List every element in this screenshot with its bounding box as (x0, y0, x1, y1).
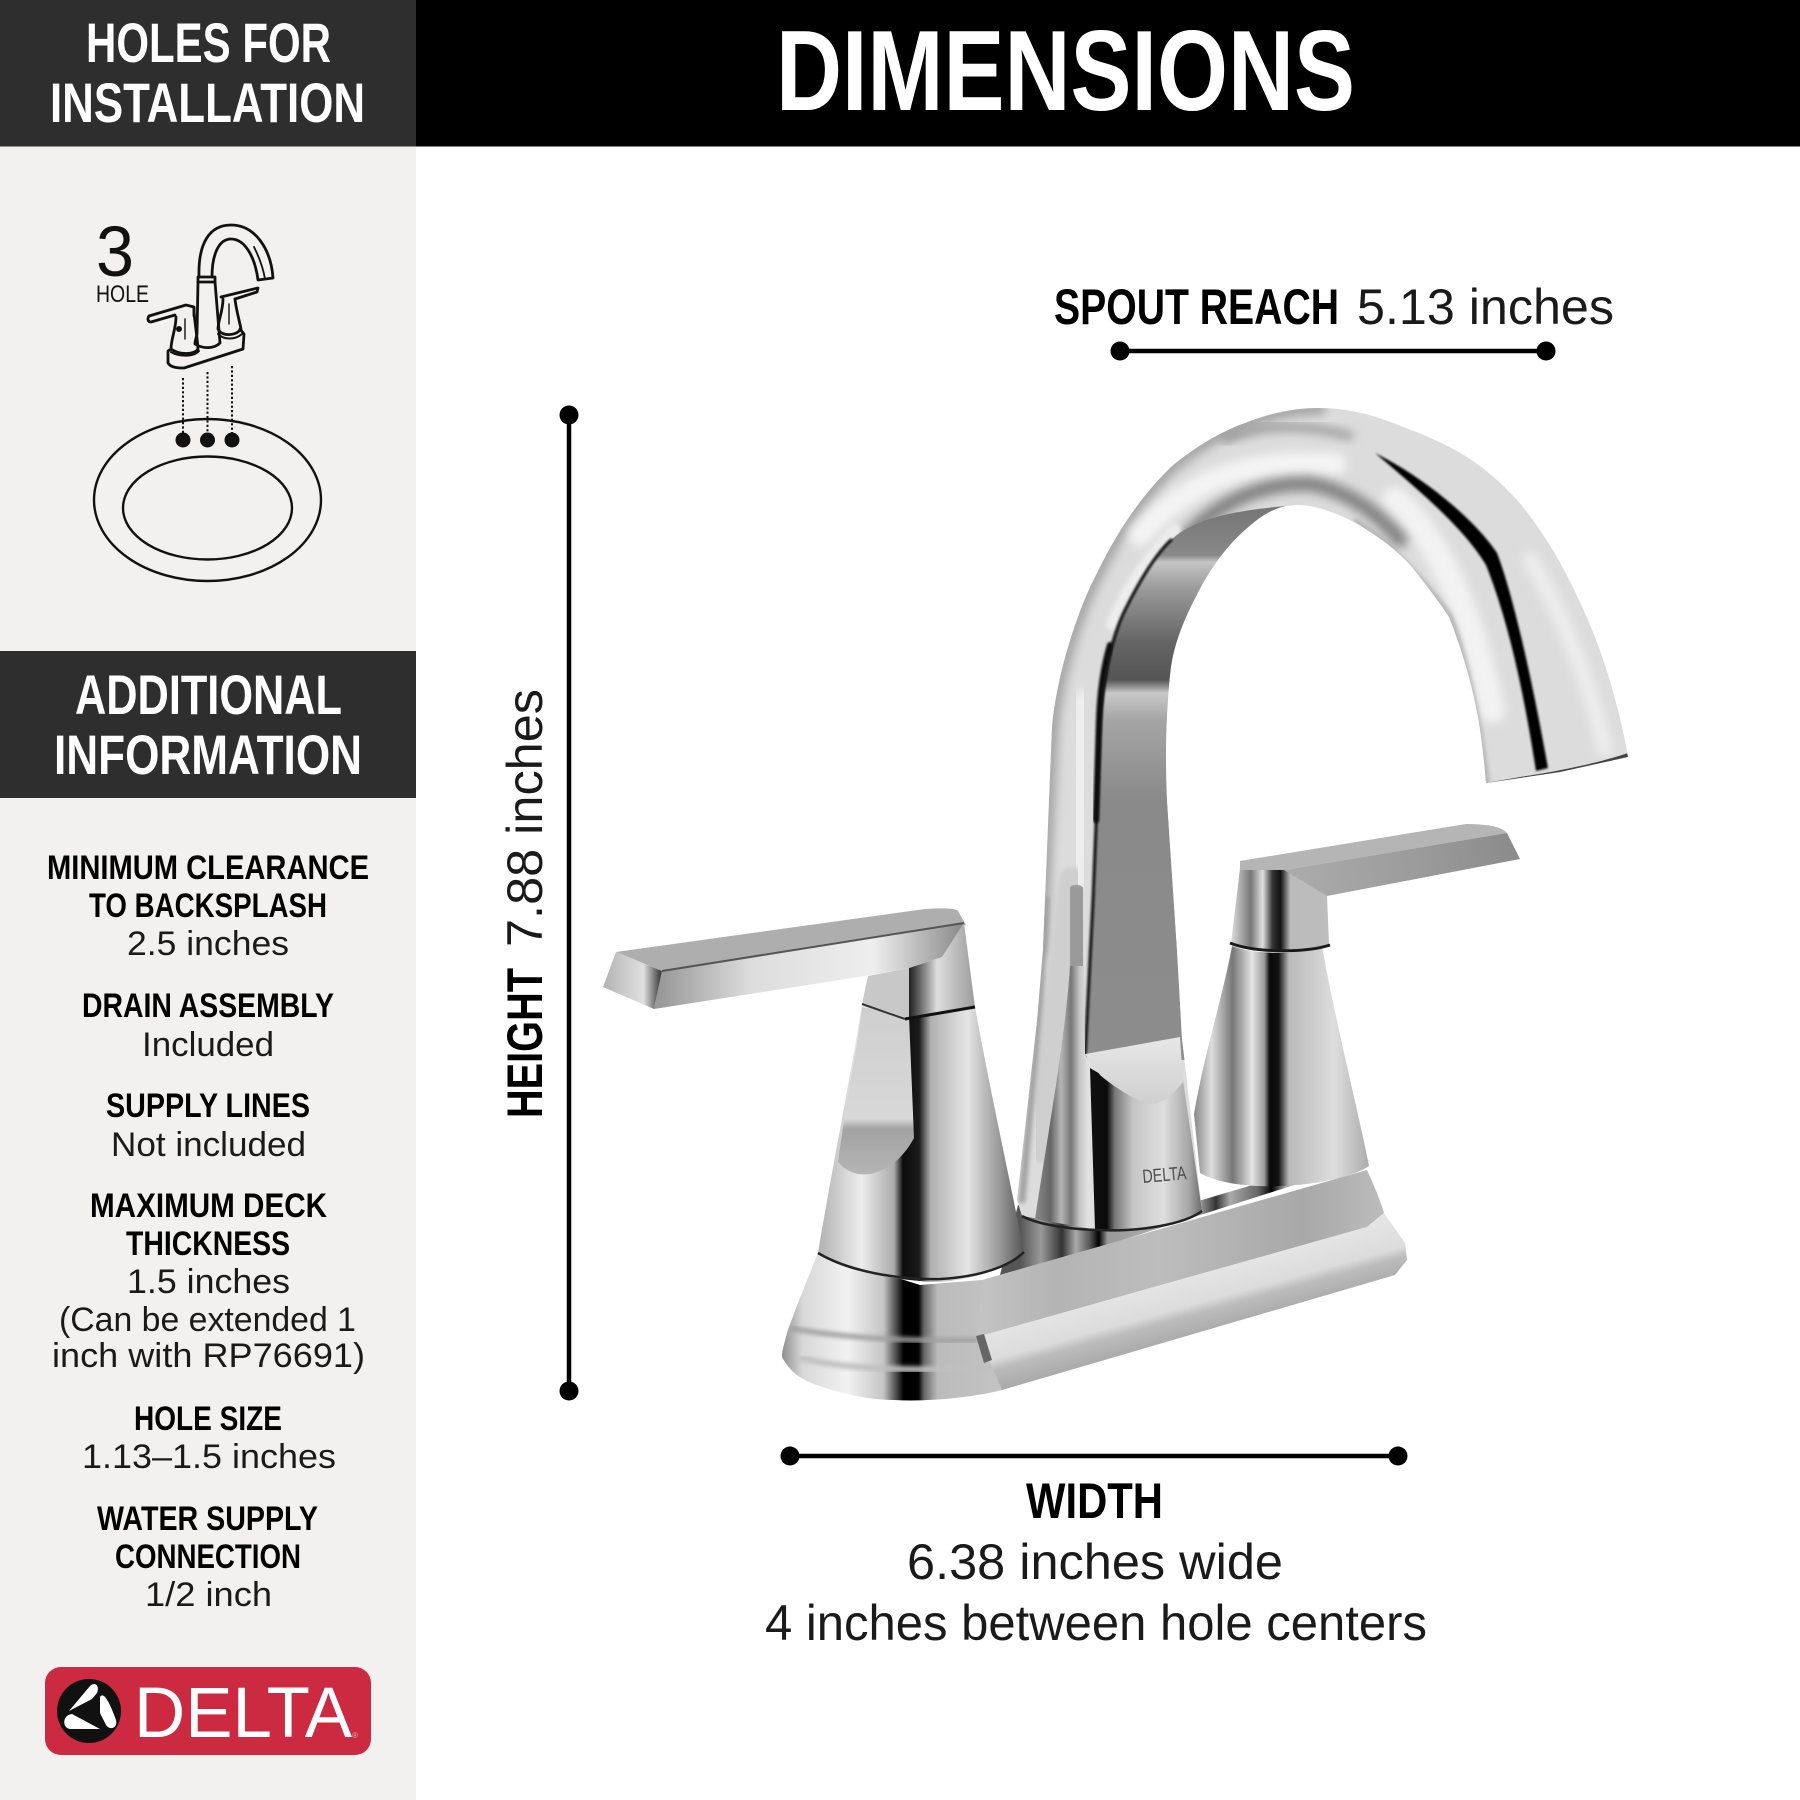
text: maximum deck thickness: MAXIMUM DECK (90, 1187, 327, 1225)
icon label: 3 hole (96, 213, 149, 308)
text: maximum deck thickness: inch with RP76691) (52, 1337, 365, 1375)
faucet: center light panel (1085, 1037, 1183, 1104)
chrome faucet photo (603, 390, 1650, 1400)
deck stepped bands (790, 1328, 978, 1340)
faucet: left cone (818, 1004, 1024, 1282)
heading: holes for installation: HOLES FOR (86, 11, 331, 74)
faucet: lower body stripes (1035, 966, 1097, 1230)
dimension: spout reach: SPOUT REACH (1054, 279, 1339, 335)
faucet: center cone (1090, 1068, 1202, 1230)
faucet: left neck (909, 923, 975, 1018)
icon: 3 hole faucet over sink (94, 213, 321, 581)
text: water supply connection: WATER SUPPLY (97, 1500, 318, 1538)
faucet: right neck (1231, 868, 1329, 950)
spout black line (1085, 540, 1171, 1057)
heading: additional information (0, 651, 416, 798)
text: water supply connection (97, 1500, 318, 1614)
dimension: height: HEIGHT (497, 968, 553, 1118)
icon label: 3 hole: 3 (96, 213, 134, 292)
dimension: width: 6.38 inches wide (907, 1534, 1283, 1590)
faucet: left handle end cap (603, 952, 662, 1009)
icon label: 3 hole: HOLE (96, 281, 149, 308)
text: hole size: 1.13–1.5 inches (82, 1438, 336, 1476)
spout inner grey arc (1175, 484, 1400, 550)
faucet: right handle top face (1240, 824, 1507, 870)
faucet: right gap line (1230, 943, 1330, 951)
icon: mini faucet outline (148, 225, 273, 368)
text: supply lines (106, 1087, 310, 1164)
deck front face (977, 1170, 1384, 1337)
faucet: left cone light panel (838, 1007, 914, 1174)
icon: dotted guide lines (183, 366, 232, 436)
dimension: spout reach (1054, 279, 1614, 360)
text: water supply connection: CONNECTION (115, 1538, 301, 1576)
text: drain assembly: DRAIN ASSEMBLY (82, 987, 334, 1025)
text: drain assembly: Included (142, 1026, 274, 1064)
spout flat blade (1085, 505, 1297, 1060)
faucet: left neck facet (862, 968, 909, 1018)
text: maximum deck thickness: 1.5 inches (127, 1263, 290, 1301)
spout white body right (1395, 500, 1492, 710)
spout outer rim shading (1040, 408, 1319, 950)
faucet: right handle front face (1284, 833, 1520, 896)
deck lower lip (977, 1213, 1407, 1390)
icon: delta triangle mark (57, 1679, 121, 1743)
faucet: left cone gap line (818, 1252, 1024, 1279)
spout tip opening (1486, 753, 1628, 783)
faucet: small rod (1070, 885, 1083, 966)
faucet: delta engraving: DELTA (1142, 1163, 1188, 1188)
spout left tube body (1078, 700, 1082, 880)
text: water supply connection: 1/2 inch (145, 1576, 272, 1614)
text: minimum clearance: MINIMUM CLEARANCE (47, 849, 369, 887)
dimension: width: 4 inches between hole centers (765, 1595, 1427, 1651)
text: minimum clearance: TO BACKSPLASH (89, 887, 327, 925)
text: maximum deck thickness (52, 1187, 365, 1375)
spout light crescent (1112, 530, 1175, 625)
spout inner edge rim (1356, 523, 1486, 783)
text: hole size (82, 1400, 336, 1476)
title: dimensions: DIMENSIONS (776, 8, 1355, 135)
dimension: height: 7.88 inches (497, 689, 553, 947)
logo: delta (45, 1667, 371, 1755)
text: supply lines: Not included (111, 1126, 306, 1164)
text: maximum deck thickness: (Can be extended 1 (59, 1301, 356, 1339)
heading: additional information: INFORMATION (54, 723, 362, 786)
icon: sink outline with holes (94, 419, 321, 581)
text: minimum clearance: 2.5 inches (127, 925, 289, 963)
heading: holes for installation: INSTALLATION (50, 71, 365, 134)
dimension: height (497, 406, 578, 1400)
text: maximum deck thickness: THICKNESS (126, 1225, 290, 1263)
spout top grey highlight (1225, 427, 1350, 440)
dimension: width (765, 1446, 1427, 1651)
faucet: deck (782, 1170, 1407, 1400)
panel: left sidebar (0, 0, 416, 1800)
logo: delta: DELTA (134, 1674, 353, 1753)
faucet: right cone (1194, 946, 1369, 1186)
faucet: deck reflections (982, 1160, 1372, 1285)
deck left rounded end (782, 1253, 1002, 1400)
heading: holes for installation (0, 0, 416, 146)
text: drain assembly (82, 987, 334, 1064)
heading: additional information: ADDITIONAL (75, 663, 342, 726)
text: hole size: HOLE SIZE (134, 1400, 282, 1438)
logo: delta: ® (352, 1731, 358, 1740)
title: dimensions (416, 0, 1800, 146)
text: minimum clearance (47, 849, 369, 963)
faucet: spout (1017, 408, 1628, 1218)
faucet: left handle top face (616, 908, 966, 971)
dimension: width: WIDTH (1026, 1473, 1163, 1529)
spout dark band right (1375, 453, 1548, 771)
faucet: left handle front face (654, 923, 964, 1009)
faucet: center bottom outline (1022, 1211, 1202, 1230)
deck notch (976, 1334, 992, 1363)
dimension: spout reach: 5.13 inches (1357, 279, 1614, 335)
text: supply lines: SUPPLY LINES (106, 1087, 310, 1125)
